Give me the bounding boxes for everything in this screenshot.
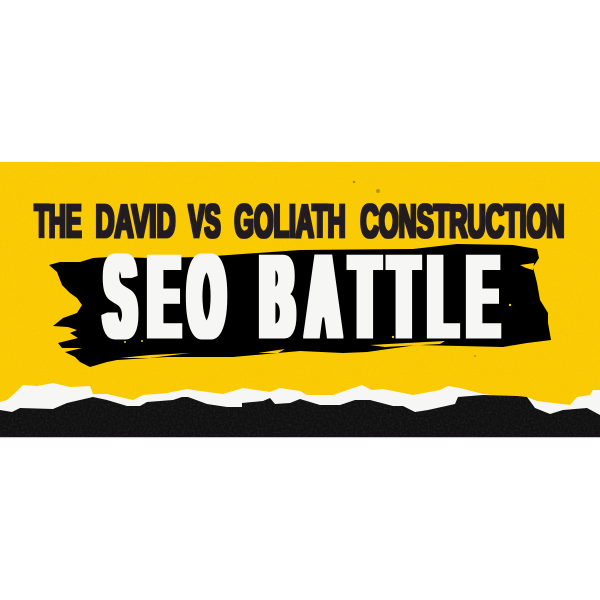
- banner: [0, 162, 600, 438]
- black brush stroke: [49, 244, 551, 367]
- heading: the david vs goliath construction: [34, 195, 565, 247]
- heading: the david vs goliath construction: DAVID: [95, 195, 176, 247]
- yellow paper background: [0, 162, 600, 438]
- heading: the david vs goliath construction: VS: [188, 195, 221, 247]
- heading: the david vs goliath construction: GOLIATH: [234, 195, 346, 247]
- torn black paper strip: [0, 395, 600, 437]
- torn white paper strip: [0, 383, 600, 420]
- heading: seo battle: SEO BATTLE: [105, 232, 498, 364]
- heading: the david vs goliath construction: THE: [34, 195, 82, 247]
